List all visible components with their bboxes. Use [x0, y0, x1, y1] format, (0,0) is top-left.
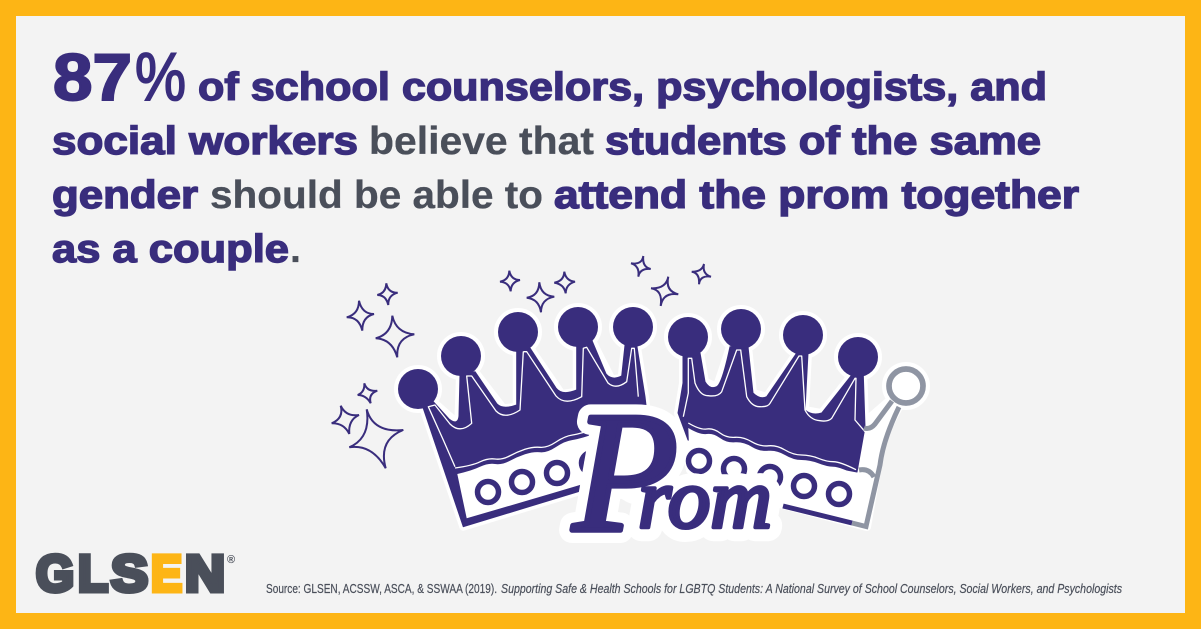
crown bottom edges: [783, 506, 852, 523]
headline statistic: %: [135, 39, 186, 115]
GLSEN logo: G: [36, 545, 74, 602]
headline statistic: 87: [53, 40, 132, 114]
crown left half: [423, 340, 650, 527]
headline statistic: attend the prom together: [554, 174, 1079, 217]
GLSEN logo: ®: [227, 554, 235, 566]
headline statistic: students of the same: [605, 120, 1041, 163]
Prom lettering: P: [572, 378, 678, 568]
headline statistic: [52, 39, 1079, 271]
headline statistic: should be able to: [210, 174, 543, 217]
GLSEN logo: S: [111, 545, 148, 602]
headline statistic: gender: [52, 174, 198, 217]
Prom lettering: [572, 378, 772, 568]
headline statistic: social workers: [52, 120, 358, 163]
headline statistic: believe that: [369, 120, 594, 163]
crown illustration: [398, 307, 926, 568]
Prom lettering: rom: [638, 452, 772, 546]
crown jewels: [398, 307, 878, 409]
GLSEN logo: [36, 545, 235, 602]
sparkles: [332, 256, 711, 468]
headline statistic: .: [290, 228, 301, 271]
source citation: [266, 581, 1122, 596]
grey outline of unfinished crown tip: [852, 401, 899, 526]
Prom lettering: P: [572, 378, 678, 568]
grey jewel: [889, 369, 923, 403]
Prom lettering: rom: [638, 452, 772, 546]
headline statistic: of school counselors, psychologists, and: [198, 66, 1047, 109]
GLSEN logo: N: [185, 545, 225, 602]
crown band circles: [478, 450, 850, 504]
crown right half: [678, 347, 899, 526]
headline statistic: as a couple: [52, 228, 289, 271]
crown white halo: [398, 307, 926, 527]
source citation: Source: GLSEN, ACSSW, ASCA, & SSWAA (2019).: [266, 581, 497, 596]
GLSEN logo: E: [151, 545, 182, 602]
GLSEN logo: L: [78, 545, 108, 602]
